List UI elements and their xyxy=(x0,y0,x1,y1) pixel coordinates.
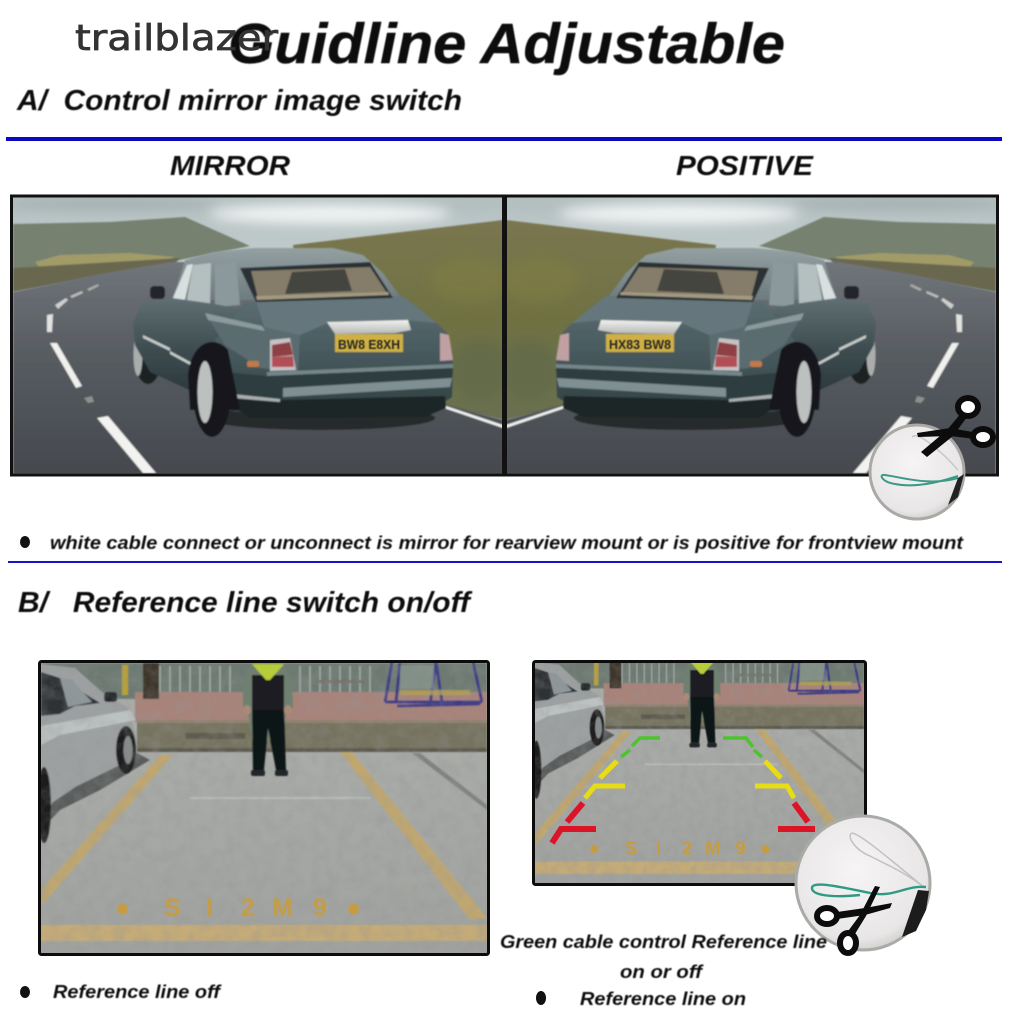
heading: section A: A/ Control mirror image switch xyxy=(16,85,462,117)
text: reference line off: Reference line off xyxy=(53,981,222,1002)
callout: green cable lens xyxy=(796,816,930,950)
divider: section A xyxy=(6,137,1002,141)
panel: reference line off photo xyxy=(37,662,488,954)
title: Guidline Adjustable xyxy=(228,12,785,76)
guidelines: red xyxy=(552,803,815,843)
plate text: mirror: BW8 E8XH xyxy=(338,337,400,352)
text: green cable note line 2: on or off xyxy=(620,961,704,982)
plate text: positive: HX83 BW8 xyxy=(609,337,671,352)
text: white cable note: white cable connect or unconnect is mirror for rearview mount or is positive for frontview mount xyxy=(50,532,964,553)
guidelines: yellow xyxy=(585,761,794,798)
divider: section B xyxy=(8,561,1002,563)
panel: positive photo xyxy=(499,196,1009,475)
panel: reference line on photo xyxy=(531,660,866,884)
panel: mirror photo xyxy=(0,196,510,475)
icon: scissors green cable xyxy=(817,886,892,953)
label: mirror: MIRROR xyxy=(170,150,291,181)
bullet: reference line on xyxy=(536,991,546,1005)
text: green cable note line 1: Green cable control Reference line xyxy=(500,931,827,952)
label: positive: POSITIVE xyxy=(676,150,814,181)
bullet: white cable xyxy=(20,536,30,548)
heading: section B: B/ Reference line switch on/off xyxy=(18,587,473,619)
guidelines: green xyxy=(621,738,762,757)
icon: scissors white cable xyxy=(917,398,993,457)
bullet: reference line off xyxy=(20,986,30,998)
watermark: trailblazer xyxy=(75,18,278,59)
text: reference line on: Reference line on xyxy=(580,988,746,1009)
callout: white cable lens xyxy=(870,425,964,519)
